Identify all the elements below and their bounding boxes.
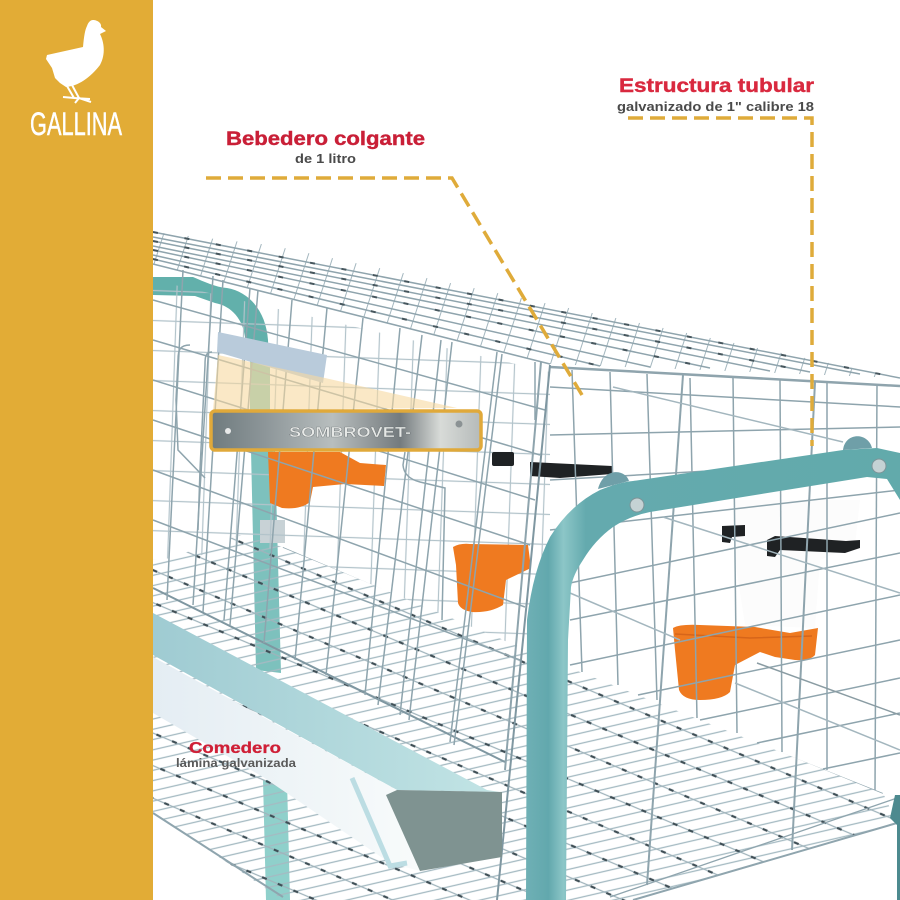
roof mesh [150,230,900,386]
feeder: pale side [153,657,420,871]
floor mesh [150,530,900,900]
drinker 2: orange cup [453,544,531,612]
front tubular frame [526,436,900,900]
back mesh panel [153,286,550,641]
leader line: bebedero [206,178,582,395]
back cage frame [153,277,290,900]
leader line: estructura [628,118,812,446]
right side mesh [535,362,900,885]
label: bebedero colgante: Bebedero colgante [226,129,425,150]
icon: hen silhouette [46,20,106,103]
label: estructura tubular: galvanizado de 1" calibre 18 [617,100,814,114]
floor edge rails [153,798,897,900]
drinker 2: black ring and clip [492,452,612,478]
frame: end caps [598,472,629,489]
frame: bolts [630,498,644,512]
feeder: end cap [386,790,502,871]
sidebar title: GALLINA [30,106,122,142]
drinker 1: orange cup [268,452,386,508]
label: comedero: lámina galvanizada [176,756,296,770]
drinker 3: bottle [735,500,860,628]
feeder trough [153,613,502,871]
sidebar [0,0,153,900]
drinker 3: black ring and clip [722,525,860,557]
long side mesh [153,270,550,900]
tag: screws [225,428,231,434]
feeder: teal top face [153,613,500,792]
feeder: bracket [352,778,407,866]
label: comedero [176,740,296,770]
label: estructura tubular [617,76,815,114]
frame: right leg [890,795,900,900]
drinker 3: orange cup [673,625,818,700]
label: bebedero colgante [226,129,425,166]
highlighted brand tag [211,332,481,450]
tag: beige highlight cone [213,355,457,410]
tag: metal plate behind [217,332,327,383]
tag: plate with gold border [211,411,481,450]
label: comedero: Comedero [189,740,281,757]
label: bebedero colgante: de 1 litro [295,152,356,166]
label: estructura tubular: Estructura tubular [619,76,815,97]
tag: brand text: SOMBROVET- [289,424,411,441]
